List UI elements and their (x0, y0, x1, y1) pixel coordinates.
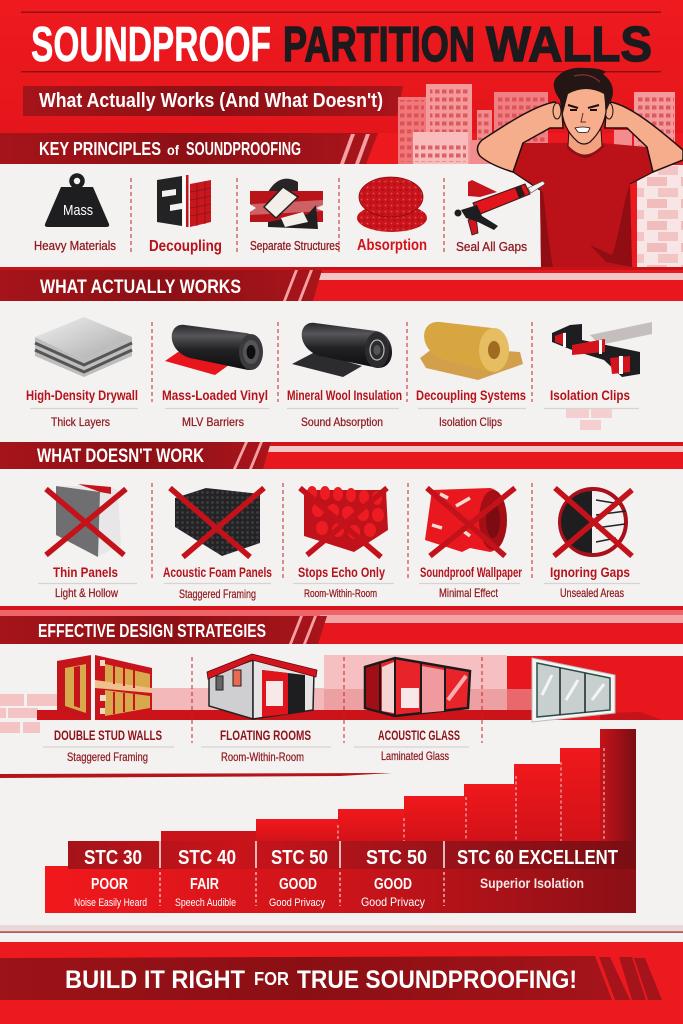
section band: effective design strategies (0, 606, 683, 644)
footer banner: TRUE SOUNDPROOFING! (297, 966, 577, 994)
icon: glass window (532, 658, 615, 722)
panel: what actually works (0, 301, 683, 442)
sublabel: laminated glass: Laminated Glass (381, 749, 449, 763)
label: absorption: Absorption (357, 237, 427, 254)
label: soundproof wallpaper: Soundproof Wallpaper (420, 564, 522, 580)
icon: red foam wedges crossed (300, 486, 388, 557)
rating: STC 40: FAIR (190, 876, 219, 893)
icon: mineral wool black roll (292, 323, 392, 377)
icon: wallpaper roll crossed (425, 488, 515, 556)
sublabel: room within room: Room-Within-Room (221, 750, 304, 764)
label: decoupling systems: Decoupling Systems (416, 387, 526, 403)
label: double stud walls: DOUBLE STUD WALLS (54, 728, 162, 743)
rating: STC 50 second: GOOD (374, 876, 412, 893)
label: thin panels: Thin Panels (53, 564, 118, 580)
footer banner: FOR (254, 969, 289, 989)
rating: STC 30: Noise Easily Heard (74, 897, 147, 909)
label: ignoring gaps: Ignoring Gaps (550, 564, 630, 580)
title: PARTITION (283, 18, 475, 72)
label: mineral wool insulation: Mineral Wool Insulation (287, 387, 402, 403)
head (553, 68, 613, 144)
rating: STC 30: POOR (91, 876, 128, 893)
icon: isolation clips (552, 322, 652, 377)
rating: STC 40: Speech Audible (175, 897, 236, 909)
icon: mass weight (45, 176, 109, 227)
icon: foam panels crossed (170, 488, 264, 557)
label: decoupling: Decoupling (149, 238, 222, 255)
title: SOUNDPROOF (31, 18, 271, 72)
panel: what doesn't work (0, 469, 683, 606)
label: high-density drywall: High-Density Drywall (26, 387, 138, 403)
arm: right (605, 102, 683, 172)
section band: what doesn't work (0, 442, 683, 469)
header (0, 0, 683, 133)
section band: key principles: SOUNDPROOFING (186, 139, 301, 159)
label: heavy materials: Heavy Materials (34, 238, 116, 253)
title (31, 18, 652, 72)
sublabel: thick layers: Thick Layers (51, 415, 110, 429)
footer banner (0, 942, 683, 1024)
rating: STC 50: Good Privacy (269, 897, 325, 909)
rating: STC 50 second: STC 50 (366, 847, 427, 869)
rating: STC 40 (175, 847, 236, 909)
small brick decoration (566, 409, 612, 430)
section band: what actually works: WHAT ACTUALLY WORKS (40, 277, 241, 298)
rating: STC 50 second: Good Privacy (361, 895, 425, 909)
sublabel: isolation clips: Isolation Clips (439, 415, 502, 429)
label: acoustic foam panels: Acoustic Foam Panels (163, 564, 272, 580)
icon: floating room (207, 654, 317, 719)
rating: STC 30: STC 30 (84, 847, 142, 869)
rating: STC 40: STC 40 (178, 847, 236, 869)
sublabel: unsealed areas: Unsealed Areas (560, 586, 624, 600)
red backdrop band (0, 655, 683, 733)
rating: STC 60 excellent (457, 847, 618, 891)
icon: mass weight: Mass (63, 202, 93, 219)
rating: STC 30 (74, 847, 147, 909)
section band: what actually works (0, 267, 683, 301)
label: mass-loaded vinyl: Mass-Loaded Vinyl (162, 387, 268, 403)
sublabel: room within room: Room-Within-Room (304, 588, 377, 600)
section band: key principles (0, 133, 378, 164)
label: separate structures: Separate Structures (250, 239, 340, 253)
subtitle banner (23, 86, 403, 116)
icon: mass loaded vinyl roll (165, 325, 263, 375)
neck (568, 130, 602, 157)
sublabel: sound absorption: Sound Absorption (301, 415, 383, 429)
footer divider (0, 925, 683, 933)
sublabel: staggered framing: Staggered Framing (179, 587, 256, 601)
title: WALLS (486, 18, 652, 72)
sublabel: mlv barriers: MLV Barriers (182, 415, 244, 429)
footer banner: BUILD IT RIGHT (65, 966, 245, 994)
illustration: person covering ears (477, 68, 683, 267)
icon: acoustic glass room (365, 658, 470, 716)
arm: left (477, 102, 563, 172)
rating: STC 60 excellent: Superior Isolation (480, 875, 584, 891)
label: seal all gaps: Seal All Gaps (456, 239, 527, 254)
section band: effective design strategies: EFFECTIVE DESIGN STRATEGIES (38, 621, 266, 641)
section band: key principles: KEY PRINCIPLES (39, 139, 161, 159)
panel: key principles (0, 164, 683, 267)
sublabel: light and hollow: Light & Hollow (55, 586, 118, 600)
label: floating rooms: FLOATING ROOMS (220, 728, 311, 743)
icon: absorption foam (357, 177, 427, 232)
icon: drywall stack (35, 317, 132, 377)
icon: caulk gun (454, 180, 545, 235)
label: stops echo only: Stops Echo Only (298, 564, 385, 580)
rating: STC 50: STC 50 (271, 847, 328, 869)
label: acoustic glass: ACOUSTIC GLASS (378, 728, 460, 743)
sublabel: staggered framing: Staggered Framing (67, 750, 148, 764)
rating: STC 50: GOOD (279, 876, 317, 893)
panel: design strategies and STC scale (0, 644, 683, 942)
shirt (513, 143, 653, 267)
icon: separate structures (250, 179, 323, 229)
icon: gaps circle crossed (554, 488, 632, 556)
city skyline (398, 84, 675, 164)
icon: insulation roll (420, 322, 523, 380)
section band: what doesn't work: WHAT DOESN'T WORK (37, 446, 204, 467)
sublabel: minimal effect: Minimal Effect (439, 586, 499, 600)
rating: STC 60 excellent: STC 60 EXCELLENT (457, 847, 618, 869)
STC rating staircase chart (45, 729, 636, 913)
section band: key principles: of (167, 142, 179, 158)
rating: STC 50 second (361, 847, 427, 909)
icon: decoupling wall (157, 175, 211, 227)
label: isolation clips: Isolation Clips (550, 387, 630, 403)
subtitle banner: What Actually Works (And What Doesn't) (39, 90, 383, 112)
icon: thin panels crossed (46, 484, 126, 557)
icon: double stud walls (57, 655, 152, 721)
rating: STC 50 (269, 847, 328, 909)
